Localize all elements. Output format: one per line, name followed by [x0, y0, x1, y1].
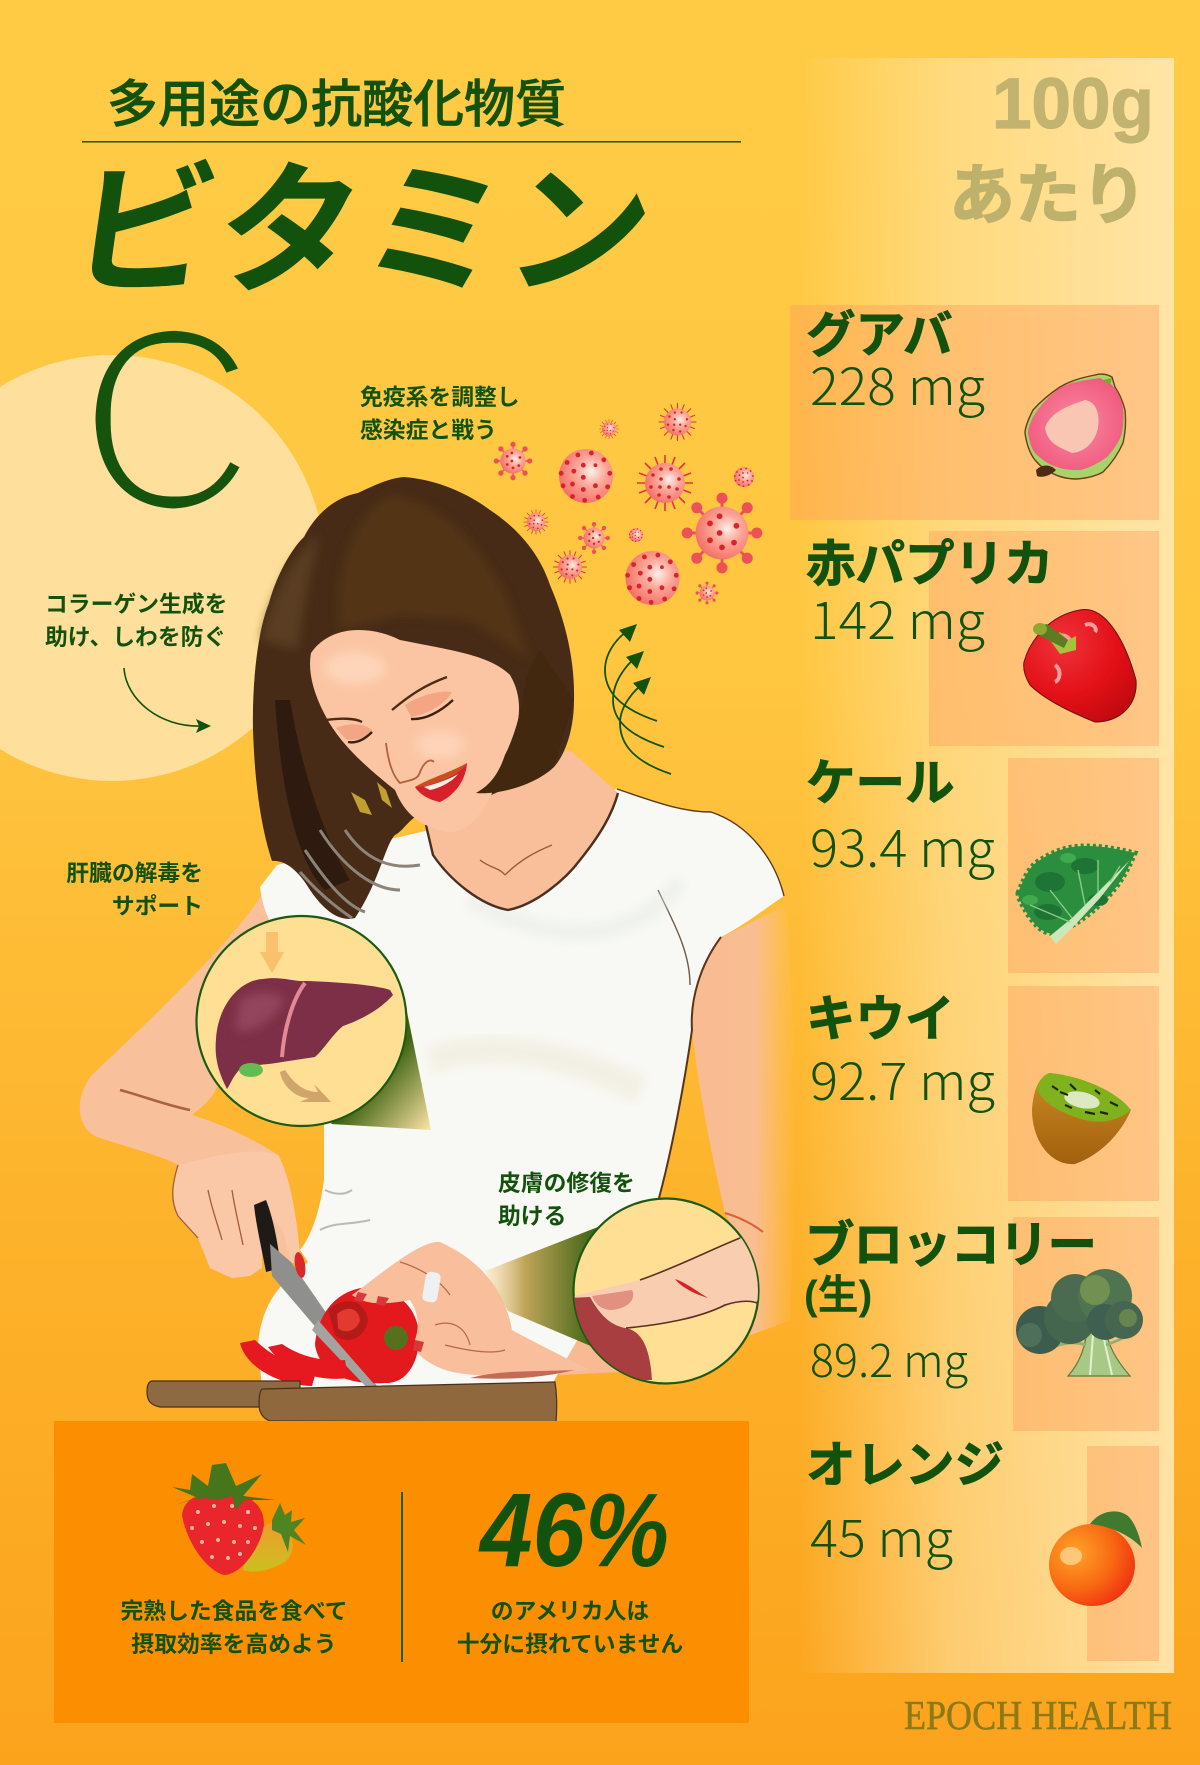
cut [675, 1279, 708, 1298]
row: broccoli [804, 1217, 1159, 1431]
arrows: toward viruses [605, 624, 671, 774]
callout: immune: 免疫系を調整し [360, 384, 520, 410]
callout: skin repair [498, 1170, 635, 1229]
row: orange [806, 1438, 1159, 1661]
right bob tip [476, 650, 574, 793]
callout: skin repair: 皮膚の修復を [498, 1170, 635, 1196]
title: vitamin: ビタミン [62, 153, 664, 312]
arrow out [280, 1070, 331, 1102]
right arm [515, 905, 794, 1375]
percent: 46% [478, 1472, 669, 1589]
icon: guava [1025, 374, 1126, 479]
wedge [331, 1012, 431, 1130]
viruses [494, 403, 761, 605]
subtitle: 多用途の抗酸化物質 [107, 76, 566, 133]
nose [386, 743, 434, 783]
face [310, 630, 519, 832]
divider [401, 1492, 403, 1662]
callout: immune: 感染症と戦う [360, 417, 497, 443]
callout: collagen [45, 591, 227, 650]
callout: skin repair: 助ける [498, 1203, 566, 1229]
row: kiwi: 92.7 mg [810, 1041, 995, 1115]
row: orange: オレンジ [806, 1438, 1004, 1493]
icon: kale [1018, 846, 1135, 944]
header: per 100 g [949, 65, 1154, 232]
text: american share: のアメリカ人は [491, 1598, 649, 1624]
knife [254, 1200, 281, 1272]
title rule [82, 141, 741, 143]
text: ripe food: 摂取効率を高めよう [131, 1631, 337, 1657]
arrow: collagen [124, 668, 211, 733]
pepper being cut [315, 1287, 419, 1383]
text: american share: 十分に摂れていません [457, 1631, 683, 1657]
hair strands over shirt [300, 830, 420, 918]
right hand [352, 1242, 590, 1376]
gall bladder [239, 1063, 263, 1077]
t-shirt [258, 789, 784, 1388]
skin inset [485, 1198, 770, 1384]
row: kale: 93.4 mg [810, 808, 995, 882]
row: red pepper: 142 mg [810, 580, 985, 654]
logo: EPOCH HEALTH [904, 1692, 1172, 1738]
left hand [173, 1152, 301, 1278]
callout: liver: 肝臓の解毒を [66, 860, 203, 886]
decorative pale circle [0, 355, 325, 781]
callout: collagen: コラーゲン生成を [45, 591, 227, 617]
row: guava: グアバ [806, 308, 953, 363]
strawberries [172, 1463, 306, 1575]
icon: pepper [1024, 610, 1136, 722]
row: kale: ケール [806, 756, 954, 811]
header: per 100 g: あたり [949, 158, 1147, 232]
eyes and brows [326, 677, 447, 722]
row: broccoli: (生) [804, 1272, 872, 1318]
row: red pepper [806, 531, 1159, 746]
wedge [485, 1227, 598, 1347]
left upper arm [80, 890, 300, 1278]
row: broccoli: 89.2 mg [810, 1325, 968, 1390]
row: guava: 228 mg [810, 346, 985, 420]
callout: liver: サポート [112, 893, 203, 919]
title: letter C: C [79, 272, 256, 566]
woman illustration [80, 477, 794, 1422]
icon: kiwi [1032, 1073, 1131, 1164]
pepper slices [240, 1340, 348, 1386]
food table panel background [799, 58, 1174, 1673]
row: kiwi [806, 986, 1159, 1201]
row: red pepper: 赤パプリカ [806, 537, 1054, 592]
hair [253, 477, 574, 919]
arrow in [260, 932, 284, 973]
header: per 100 g: 100g [992, 65, 1154, 144]
callout: immune [360, 384, 520, 443]
text: ripe food: 完熟した食品を食べて [120, 1598, 348, 1624]
liver inset [196, 916, 431, 1130]
liver [216, 978, 393, 1089]
icon: broccoli [1016, 1269, 1143, 1376]
stat panel [54, 1421, 749, 1723]
neck and chest [426, 750, 618, 910]
cutting board [147, 1381, 300, 1407]
text: ripe food [120, 1598, 348, 1657]
callout: collagen: 助け、しわを防ぐ [45, 624, 226, 650]
earrings [351, 782, 392, 815]
icon: orange [1049, 1511, 1142, 1606]
row: orange: 45 mg [810, 1498, 953, 1572]
lips [415, 763, 467, 802]
callout: liver [66, 860, 203, 919]
row: kiwi: キウイ [806, 992, 954, 1047]
row: kale [806, 756, 1159, 973]
row: broccoli: ブロッコリー [805, 1218, 1097, 1273]
row: guava [790, 305, 1159, 520]
text: american share [457, 1598, 683, 1657]
